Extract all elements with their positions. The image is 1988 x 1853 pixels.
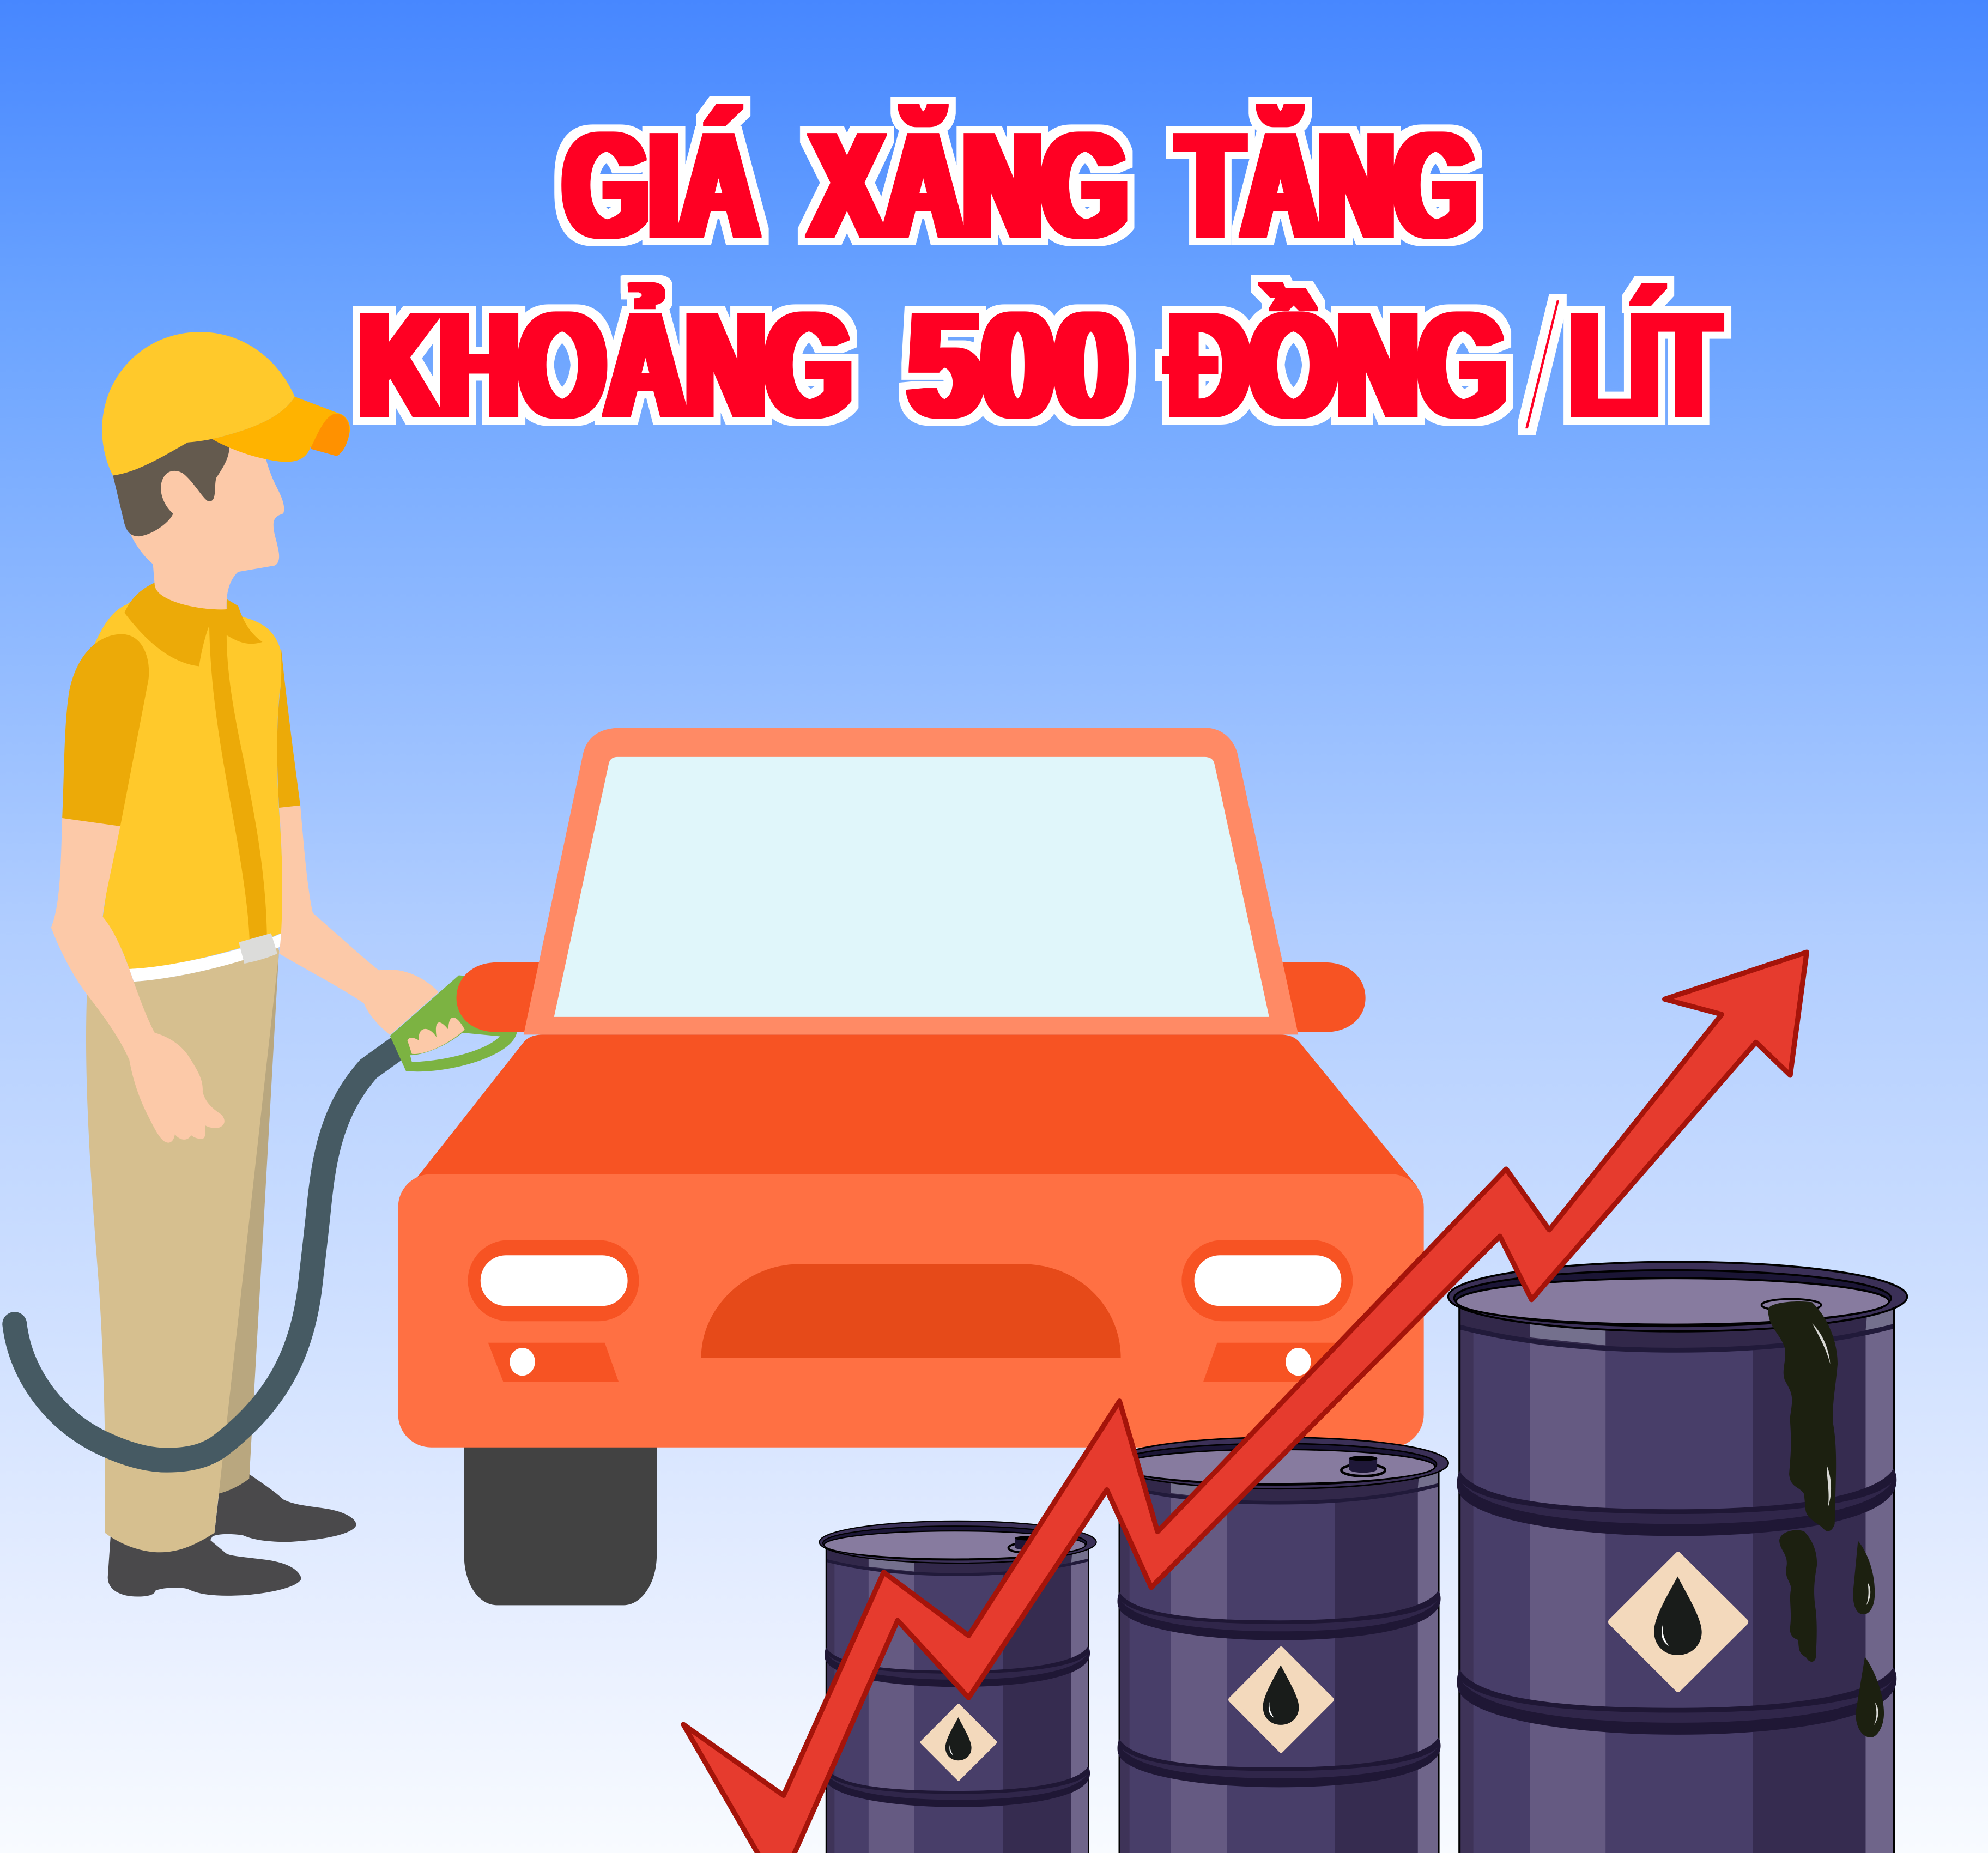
windshield frame (524, 728, 1298, 1034)
face and neck (130, 437, 284, 609)
car (398, 728, 1424, 1605)
small oil barrel (819, 1521, 1096, 1853)
fuel nozzle (390, 976, 517, 1071)
right arm and hand (279, 806, 439, 1035)
shirt (94, 584, 283, 969)
attendant shirt and collar (62, 583, 300, 969)
left arm and hand (51, 818, 225, 1143)
attendant arms (51, 806, 439, 1143)
medium barrel diamond label (1231, 1649, 1332, 1751)
small barrel diamond label (922, 1705, 996, 1779)
title words: TĂNG (1178, 102, 1476, 268)
trousers (86, 947, 279, 1552)
grille (701, 1264, 1121, 1358)
cap visor (212, 397, 350, 462)
fuel hose (15, 1047, 398, 1460)
medium oil barrel (1111, 1437, 1448, 1853)
title slash: / (1520, 269, 1565, 464)
title words: KHOẢNG (359, 282, 852, 448)
back shoe (210, 1474, 356, 1542)
nozzle body (390, 976, 517, 1071)
left fog light (488, 1343, 619, 1382)
collar and placket (124, 583, 267, 942)
hood (405, 1034, 1417, 1217)
title words: XĂNG (810, 102, 1128, 268)
belt (129, 933, 282, 982)
cap crown (102, 332, 295, 476)
trousers shadow (212, 949, 279, 1533)
left mirror (457, 962, 545, 1032)
left wheel (464, 1433, 657, 1605)
fingers (408, 1018, 465, 1054)
oil highlights (1812, 1323, 1878, 1725)
right fog light (1203, 1343, 1335, 1382)
large barrel diamond label (1611, 1555, 1745, 1689)
barrel cap ring (1761, 1299, 1821, 1311)
right headlight (1181, 1240, 1353, 1321)
car body (398, 1174, 1424, 1448)
front shoe (108, 1533, 301, 1597)
gas station attendant (51, 332, 439, 1597)
title words: LÍT (1571, 282, 1719, 448)
right sleeve (277, 646, 300, 808)
large oil barrel (1448, 1262, 1907, 1853)
rising price arrow (683, 952, 1807, 1853)
left sleeve (62, 634, 149, 826)
right mirror (1274, 962, 1366, 1032)
left headlight (468, 1240, 639, 1321)
title words: GIÁ (563, 102, 758, 268)
attendant lower body (86, 933, 356, 1597)
belt loop (239, 933, 277, 964)
title words: ĐỒNG (1168, 282, 1506, 448)
title words: 500 (908, 282, 1128, 448)
cap visor tip (311, 414, 349, 456)
windshield (554, 757, 1269, 1017)
attendant head (102, 332, 350, 609)
oil spill (1768, 1301, 1884, 1737)
title words (359, 102, 1719, 448)
hair (113, 438, 229, 536)
title (359, 102, 1719, 464)
